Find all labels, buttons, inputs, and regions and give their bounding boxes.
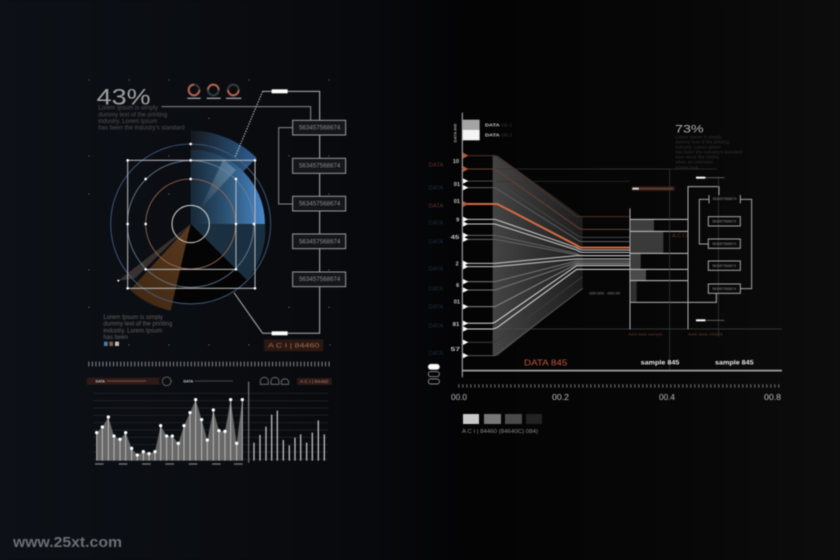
side DATA labels (429, 163, 444, 357)
side numbers: 6 (456, 283, 459, 289)
bottom captions (629, 331, 724, 336)
side numbers: 01 (454, 300, 460, 306)
text block: lorem top: dummy text of the printing (98, 113, 167, 119)
side numbers: 2 (456, 262, 459, 268)
small data boxes: 563457568674 (713, 197, 737, 201)
bar frame (630, 187, 719, 329)
blue wedges (171, 131, 265, 303)
text block: lorem top (98, 106, 185, 131)
toggle icons (428, 364, 439, 384)
color legend (462, 414, 542, 435)
text block: lorem top: industry. Lorem Ipsum (98, 119, 157, 125)
x axis labels: 00.2 (552, 393, 570, 402)
text block: lorem: has been the industry's standard (675, 150, 743, 155)
bottom captions: Add data 25445 (688, 331, 724, 336)
heading: 73%: 73% (675, 124, 704, 136)
tick strip (458, 381, 782, 391)
x axis labels: 00.4 (659, 393, 676, 402)
text block: lorem bottom: has been (103, 335, 128, 341)
guide lines (600, 169, 718, 370)
bar chart (254, 411, 324, 461)
side DATA labels: DATA (429, 324, 444, 330)
grid lines (93, 393, 328, 459)
side DATA labels: DATA (429, 220, 444, 226)
data boxes: 563457568674 (299, 201, 341, 208)
side numbers: 45 (451, 235, 459, 241)
chart labels: DATA (96, 379, 105, 384)
left panel: radar diagram (88, 79, 346, 351)
axis (462, 113, 782, 377)
right panel: bars and boxes (600, 124, 754, 370)
bottom captions: Add data sample (629, 331, 664, 336)
ACI label: A C I I (672, 234, 688, 240)
data boxes (293, 120, 346, 287)
text block: lorem: when an unknown (675, 160, 713, 165)
badge: ACI 84460: A C I | 84460 (268, 343, 320, 350)
chart labels (87, 377, 332, 386)
text block: lorem top: Lorem Ipsum is simply (98, 106, 158, 112)
tick strip (88, 357, 331, 371)
grid of faint dots (88, 79, 331, 346)
light beam (118, 224, 191, 281)
side numbers: 57 (451, 347, 460, 353)
heading: DATA 845: DATA 845 (524, 359, 568, 368)
text block: lorem: industry. Lorem Ipsum (675, 144, 721, 149)
sample labels: sample 845 (715, 359, 754, 366)
node dots (117, 143, 256, 290)
x axis labels: 00.8 (764, 393, 782, 402)
legend top: info 1 (501, 122, 513, 127)
data boxes: 563457568674 (299, 238, 341, 245)
tags (272, 89, 288, 335)
divider (247, 382, 250, 463)
data boxes: 563457568674 (299, 124, 341, 131)
right panel: flow chart (428, 113, 782, 386)
side numbers: 01 (454, 182, 460, 188)
small data boxes: 563457568674 (712, 264, 736, 268)
connector lines (162, 91, 320, 333)
chart labels: DATA (183, 379, 193, 384)
heading: 43%: 43% (97, 84, 151, 109)
small caption: 000.000 . 000.00 (589, 291, 620, 295)
bottom-left chart panel (87, 364, 332, 465)
small data boxes (699, 195, 752, 293)
text block: lorem bottom (103, 315, 172, 341)
sample labels (641, 359, 754, 366)
text block: lorem bottom: industry. Lorem Ipsum (103, 329, 162, 335)
tag bar (632, 186, 675, 191)
text block: lorem (675, 134, 743, 170)
color legend: A C I | 84460 (84640C) 084) (462, 429, 538, 435)
arrow markers (463, 153, 468, 358)
small data boxes: 563457568674 (712, 220, 736, 224)
side DATA labels: DATA (429, 304, 444, 310)
donut icons (187, 85, 241, 98)
side numbers: 10 (453, 159, 459, 165)
side DATA labels: DATA (429, 240, 444, 246)
x axis labels (451, 393, 782, 402)
text block: lorem: dummy text of the printing (675, 139, 729, 144)
square frames (128, 160, 255, 288)
side DATA labels: DATA (429, 351, 444, 357)
area chart (95, 398, 244, 465)
orange wedge (130, 224, 191, 311)
text block: lorem: printer took (675, 165, 699, 170)
small data boxes: 563457568674 (712, 287, 736, 291)
legend swatches (104, 342, 119, 346)
rotated axis label: DATA 845 (454, 123, 458, 142)
badge: ACI 84460 (264, 339, 323, 351)
text block: lorem: ever since the 1500s, (675, 155, 720, 160)
legend top: DATA (485, 132, 500, 138)
text block: lorem bottom: Lorem Ipsum is simply (103, 315, 163, 321)
side DATA labels: DATA (429, 287, 444, 293)
flow lines (463, 156, 630, 356)
side DATA labels: DATA (429, 163, 444, 169)
sample labels: sample 845 (641, 359, 680, 366)
side numbers: 81 (453, 322, 459, 328)
side DATA labels: DATA (429, 203, 444, 209)
legend top: DATA (485, 122, 500, 128)
legend top (463, 120, 513, 140)
text block: lorem top: has been the industry's standard (98, 125, 185, 131)
text block: lorem bottom: dummy text of the printing (103, 322, 172, 328)
watermark: www.25xt.com (12, 535, 122, 551)
side DATA labels: DATA (429, 266, 444, 272)
small data boxes: 563457568674 (712, 242, 736, 246)
side DATA labels: DATA (429, 185, 444, 191)
side numbers (451, 159, 460, 353)
faint guide lines (462, 169, 782, 329)
concentric rings (111, 144, 271, 304)
legend top: info 2 (501, 132, 513, 137)
x axis labels: 00.0 (451, 393, 468, 402)
pin markers (696, 177, 724, 321)
data boxes: 563457568674 (299, 163, 341, 170)
chart labels: A C I | 84460 (300, 379, 329, 384)
side numbers: 01 (454, 199, 460, 205)
side numbers: 9 (456, 217, 459, 223)
flow band (493, 156, 583, 356)
data boxes: 563457568674 (299, 276, 341, 283)
text block: lorem: Lorem Ipsum is simply (675, 134, 722, 139)
grey bars (631, 219, 663, 302)
